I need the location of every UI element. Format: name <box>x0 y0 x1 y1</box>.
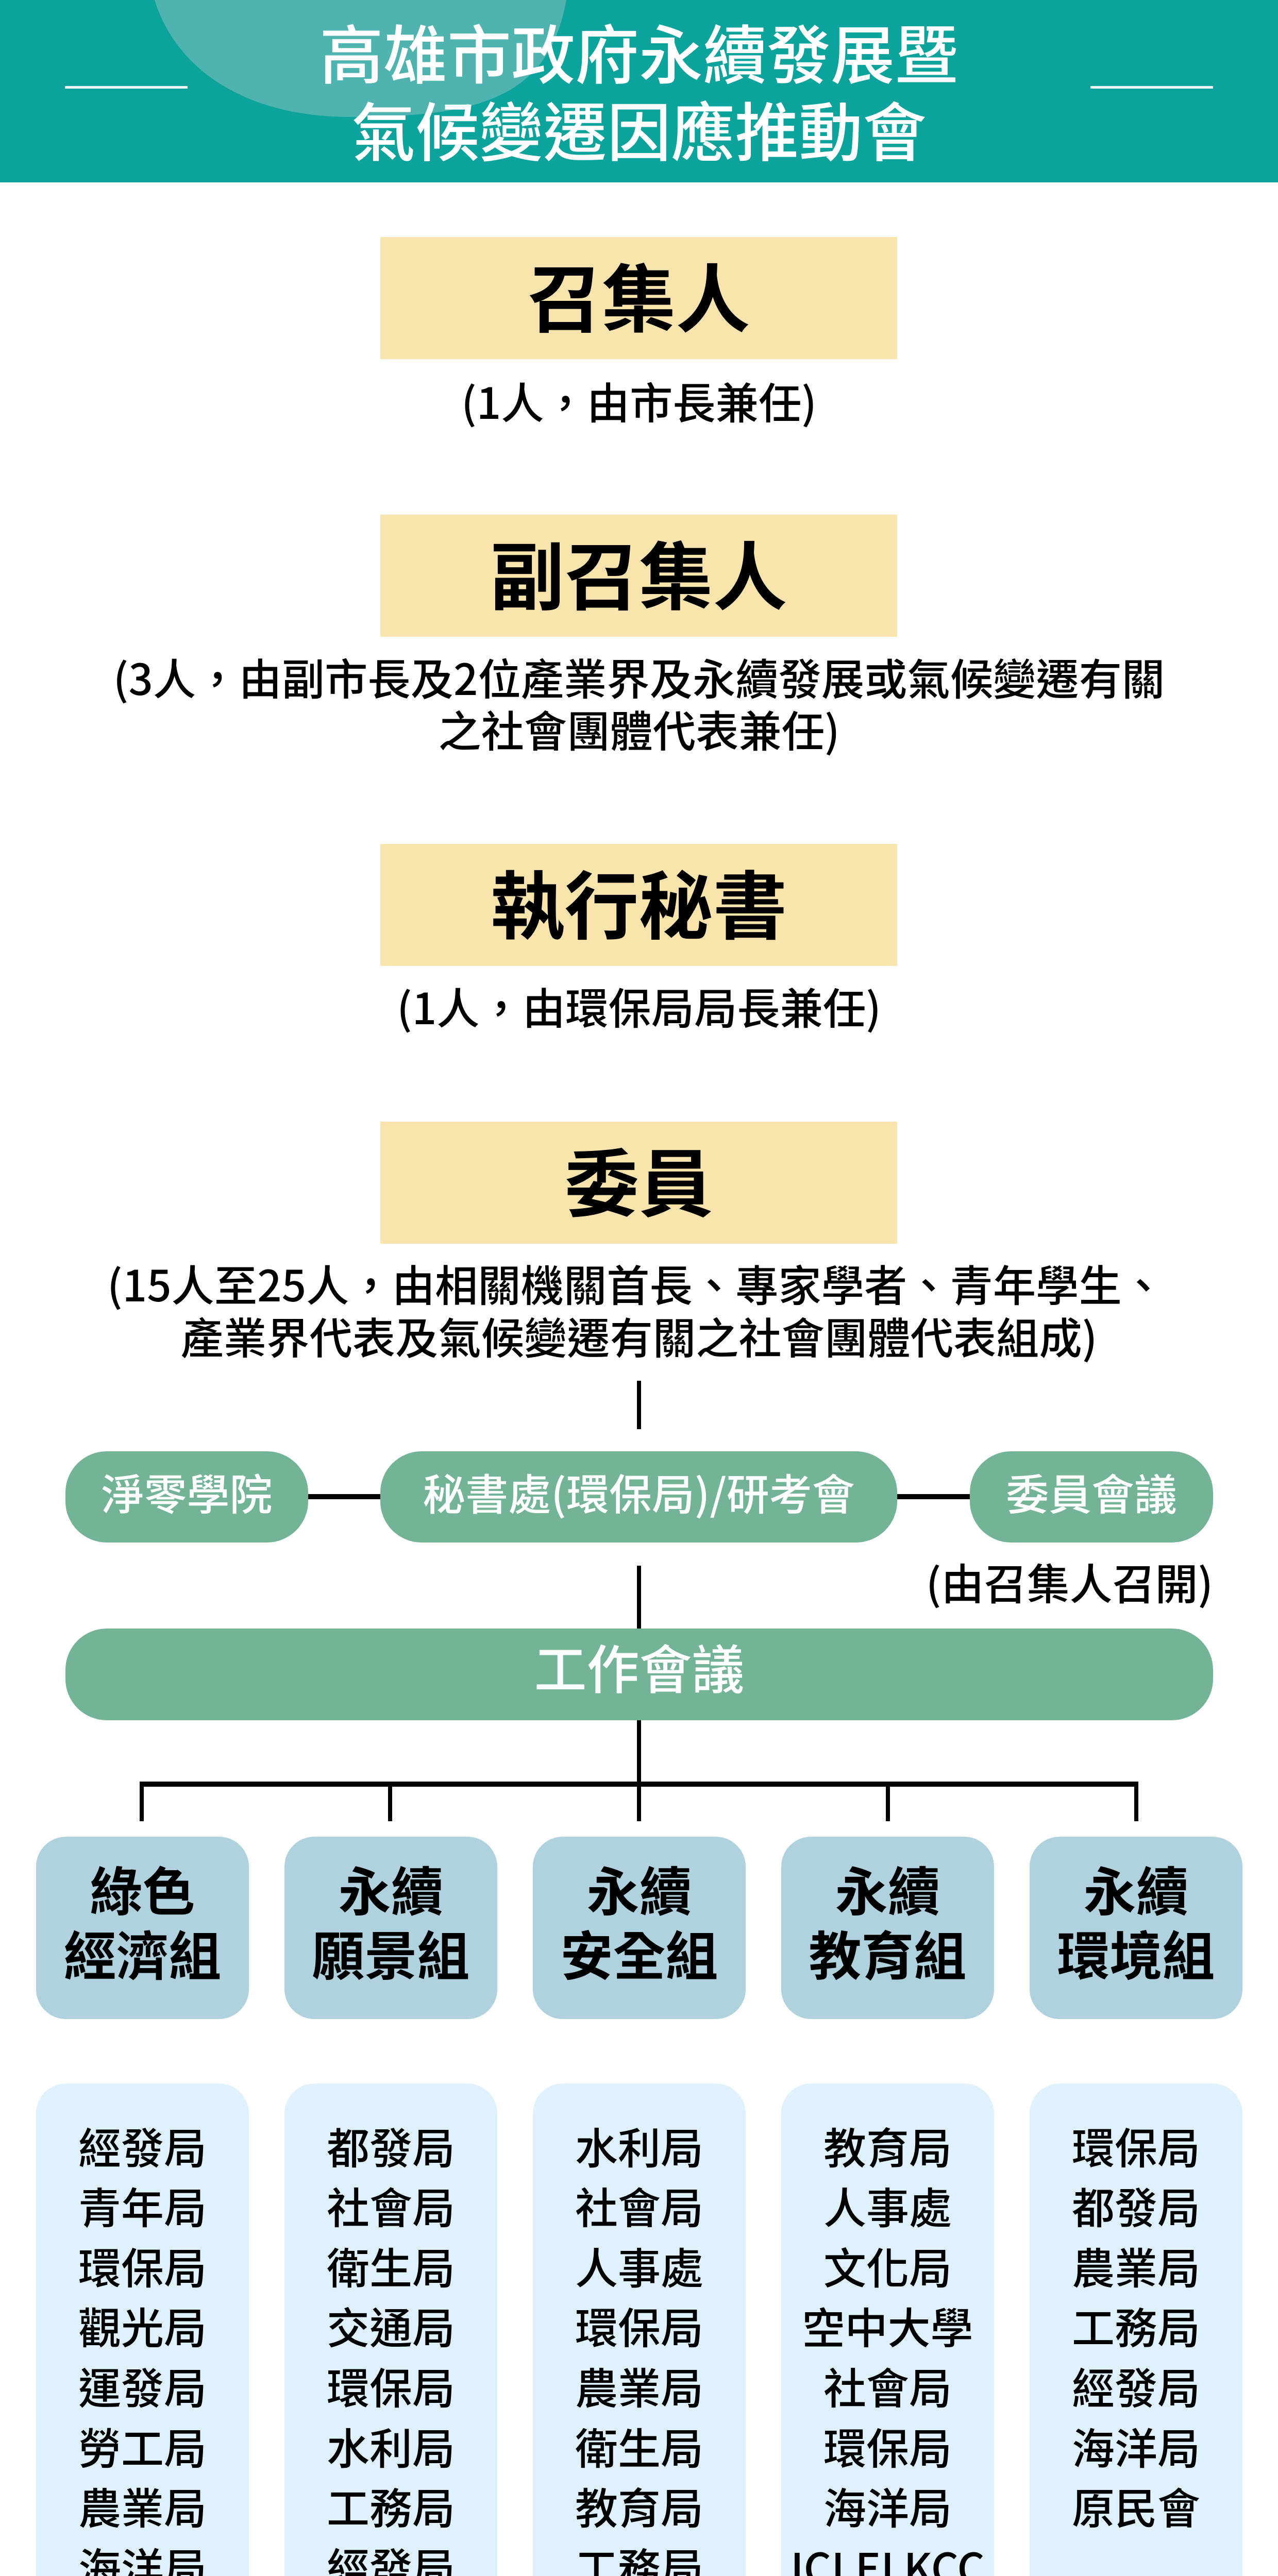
connector: 秘書處 to 委員會議 <box>897 1494 970 1499</box>
list panel: 永續願景組 members: 交通局 <box>327 2294 455 2356</box>
list panel: 永續教育組 members: 教育局 <box>823 2114 952 2176</box>
list panel: 永續願景組 members <box>284 2083 497 2576</box>
title: 氣候變遷因應推動會 <box>351 81 927 174</box>
group: 永續願景組 <box>284 1837 497 2019</box>
list panel: 永續安全組 members: 人事處 <box>575 2234 703 2296</box>
header rule right <box>1090 86 1213 89</box>
box: 執行秘書: 執行秘書 <box>490 848 787 955</box>
list panel: 永續環境組 members: 海洋局 <box>1072 2415 1200 2477</box>
list panel: 永續教育組 members: 社會局 <box>823 2354 952 2416</box>
list panel: 綠色經濟組 members: 經發局 <box>78 2114 207 2176</box>
list panel: 永續教育組 members <box>781 2083 994 2576</box>
group: 永續教育組 <box>781 1837 994 2019</box>
group: 永續教育組: 教育組 <box>809 1915 967 1991</box>
header band <box>0 0 1278 182</box>
list panel: 永續安全組 members: 水利局 <box>575 2114 703 2176</box>
connector: 淨零學院 to 秘書處 <box>308 1494 380 1499</box>
group: 永續願景組: 永續 <box>338 1851 443 1926</box>
list panel: 永續教育組 members: 海洋局 <box>823 2475 952 2536</box>
list panel: 永續願景組 members: 衛生局 <box>327 2234 455 2296</box>
group: 永續安全組 <box>533 1837 746 2019</box>
list panel: 永續環境組 members: 農業局 <box>1072 2234 1200 2296</box>
header decorative arc <box>155 0 566 117</box>
list panel: 永續願景組 members: 都發局 <box>327 2114 455 2176</box>
group: 綠色經濟組: 綠色 <box>90 1851 195 1926</box>
group: 綠色經濟組: 經濟組 <box>64 1915 222 1991</box>
list panel: 綠色經濟組 members: 觀光局 <box>78 2294 207 2356</box>
list panel: 永續願景組 members: 社會局 <box>327 2174 455 2236</box>
list panel: 永續願景組 members: 水利局 <box>327 2415 455 2477</box>
note: 副召集人: (3人，由副市長及2位產業界及永續發展或氣候變遷有關 <box>113 645 1165 707</box>
note: 委員: (15人至25人，由相關機關首長、專家學者、青年學生、 <box>107 1251 1165 1314</box>
list panel: 綠色經濟組 members <box>36 2083 249 2576</box>
list panel: 永續願景組 members: 工務局 <box>327 2475 455 2536</box>
header rule left <box>65 86 188 89</box>
pill: 淨零學院: 淨零學院 <box>101 1461 272 1522</box>
list panel: 永續安全組 members <box>533 2083 746 2576</box>
list panel: 永續教育組 members: 空中大學 <box>802 2294 973 2356</box>
box: 委員 <box>380 1122 897 1244</box>
note: 委員: 產業界代表及氣候變遷有關之社會團體代表組成) <box>181 1304 1097 1366</box>
group: 永續願景組: 願景組 <box>312 1915 470 1991</box>
list panel: 永續安全組 members: 農業局 <box>575 2354 703 2416</box>
list panel: 永續環境組 members: 經發局 <box>1072 2354 1200 2416</box>
pill: 委員會議 <box>970 1451 1213 1543</box>
list panel: 綠色經濟組 members: 勞工局 <box>78 2415 207 2477</box>
box: 副召集人 <box>380 515 897 637</box>
note: 執行秘書: (1人，由環保局局長兼任) <box>397 974 881 1037</box>
list panel: 永續安全組 members: 教育局 <box>575 2475 703 2536</box>
list panel: 永續環境組 members <box>1030 2083 1242 2576</box>
group: 綠色經濟組 <box>36 1837 249 2019</box>
group: 永續環境組 <box>1030 1837 1242 2019</box>
pill: 秘書處 <box>380 1451 897 1543</box>
list panel: 永續教育組 members: 環保局 <box>823 2415 952 2477</box>
title <box>320 4 959 174</box>
list panel: 永續教育組 members: 人事處 <box>823 2174 952 2236</box>
box: 執行秘書 <box>380 844 897 966</box>
note: 召集人: (1人，由市長兼任) <box>461 369 817 431</box>
list panel: 綠色經濟組 members: 運發局 <box>78 2354 207 2416</box>
connector: 秘書處 to 工作會議 <box>637 1566 641 1629</box>
list panel: 永續願景組 members: 環保局 <box>327 2354 455 2416</box>
group: 永續教育組: 永續 <box>835 1851 940 1926</box>
bar: 工作會議 <box>65 1629 1213 1720</box>
group: 永續安全組: 永續 <box>586 1851 692 1926</box>
box: 召集人 <box>380 237 897 359</box>
note: 副召集人: 之社會團體代表兼任) <box>438 697 840 759</box>
note: 副召集人 <box>113 645 1165 759</box>
list panel: 永續教育組 members: 文化局 <box>823 2234 952 2296</box>
list panel: 綠色經濟組 members: 青年局 <box>78 2174 207 2236</box>
list panel: 綠色經濟組 members: 環保局 <box>78 2234 207 2296</box>
note: 由召集人召開: (由召集人召開) <box>926 1550 1213 1612</box>
list panel: 永續環境組 members: 工務局 <box>1072 2294 1200 2356</box>
group: 永續環境組: 環境組 <box>1057 1915 1215 1991</box>
pill: 淨零學院 <box>65 1451 308 1543</box>
list panel: 永續環境組 members: 原民會 <box>1072 2475 1200 2536</box>
group: 永續安全組: 安全組 <box>561 1915 718 1991</box>
pill: 秘書處: 秘書處(環保局)/研考會 <box>423 1461 855 1522</box>
group: 永續環境組: 永續 <box>1083 1851 1188 1926</box>
pill: 委員會議: 委員會議 <box>1006 1461 1177 1522</box>
box: 召集人: 召集人 <box>527 241 750 348</box>
title: 高雄市政府永續發展暨 <box>320 4 959 97</box>
bar: 工作會議: 工作會議 <box>534 1629 744 1704</box>
org tree connector <box>140 1720 1138 1821</box>
list panel: 永續安全組 members: 衛生局 <box>575 2415 703 2477</box>
note: 委員 <box>107 1251 1165 1366</box>
box: 副召集人: 副召集人 <box>490 518 787 625</box>
box: 委員: 委員 <box>564 1125 713 1232</box>
list panel: 永續環境組 members: 都發局 <box>1072 2174 1200 2236</box>
list panel: 永續環境組 members: 環保局 <box>1072 2114 1200 2176</box>
list panel: 永續安全組 members: 環保局 <box>575 2294 703 2356</box>
list panel: 綠色經濟組 members: 農業局 <box>78 2475 207 2536</box>
list panel: 永續安全組 members: 社會局 <box>575 2174 703 2236</box>
connector: 委員 to 秘書處 <box>637 1381 641 1429</box>
